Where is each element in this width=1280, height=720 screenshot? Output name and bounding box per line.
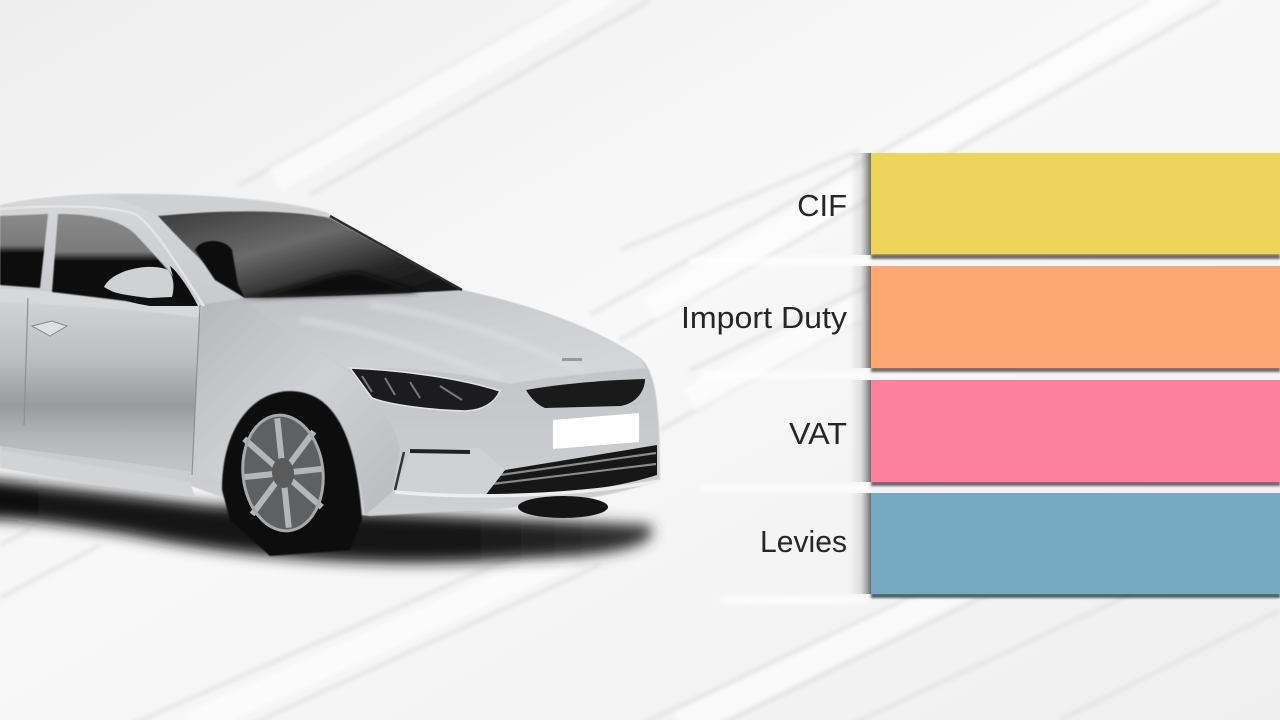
side windows [0,214,48,288]
door upper highlight [0,288,202,318]
wheel arch and front tyre [222,391,362,556]
car hood [245,290,646,384]
bar: CIF [871,153,1280,254]
icon: silver car photo [0,193,660,563]
panel: VAT row [789,380,1280,486]
bar: Import Duty [871,266,1280,368]
light horizontal bands beside bars [690,261,868,600]
front fender [190,298,400,515]
car side door panels [0,298,200,472]
label: VAT: VAT [789,416,847,451]
headlight [350,368,500,411]
alloy wheel [236,410,330,536]
car body [0,193,660,516]
bar: VAT [871,380,1280,482]
panel: Import Duty row [681,266,1280,372]
chrome lip [395,481,660,496]
wing mirror [104,266,198,306]
car ground shadow [0,478,652,563]
grille [526,379,645,408]
door handle [32,321,67,336]
windshield interior seat and wheel [195,241,245,298]
label: Levies: Levies [760,524,847,559]
sill highlight [0,450,195,497]
label: CIF: CIF [797,188,847,223]
front-right tyre [518,496,608,518]
windshield [158,211,462,298]
panel: Levies row [760,493,1280,598]
licence plate [553,413,639,449]
badge [562,358,582,361]
bar side shadows [850,153,871,594]
panel: CIF row [797,153,1280,259]
lower bumper intake [484,445,657,497]
hood crease highlight [300,305,585,378]
bar: Levies [871,493,1280,594]
fog lamp recess [395,448,505,497]
label: Import Duty: Import Duty [681,300,848,335]
car roof highlight [100,195,330,216]
